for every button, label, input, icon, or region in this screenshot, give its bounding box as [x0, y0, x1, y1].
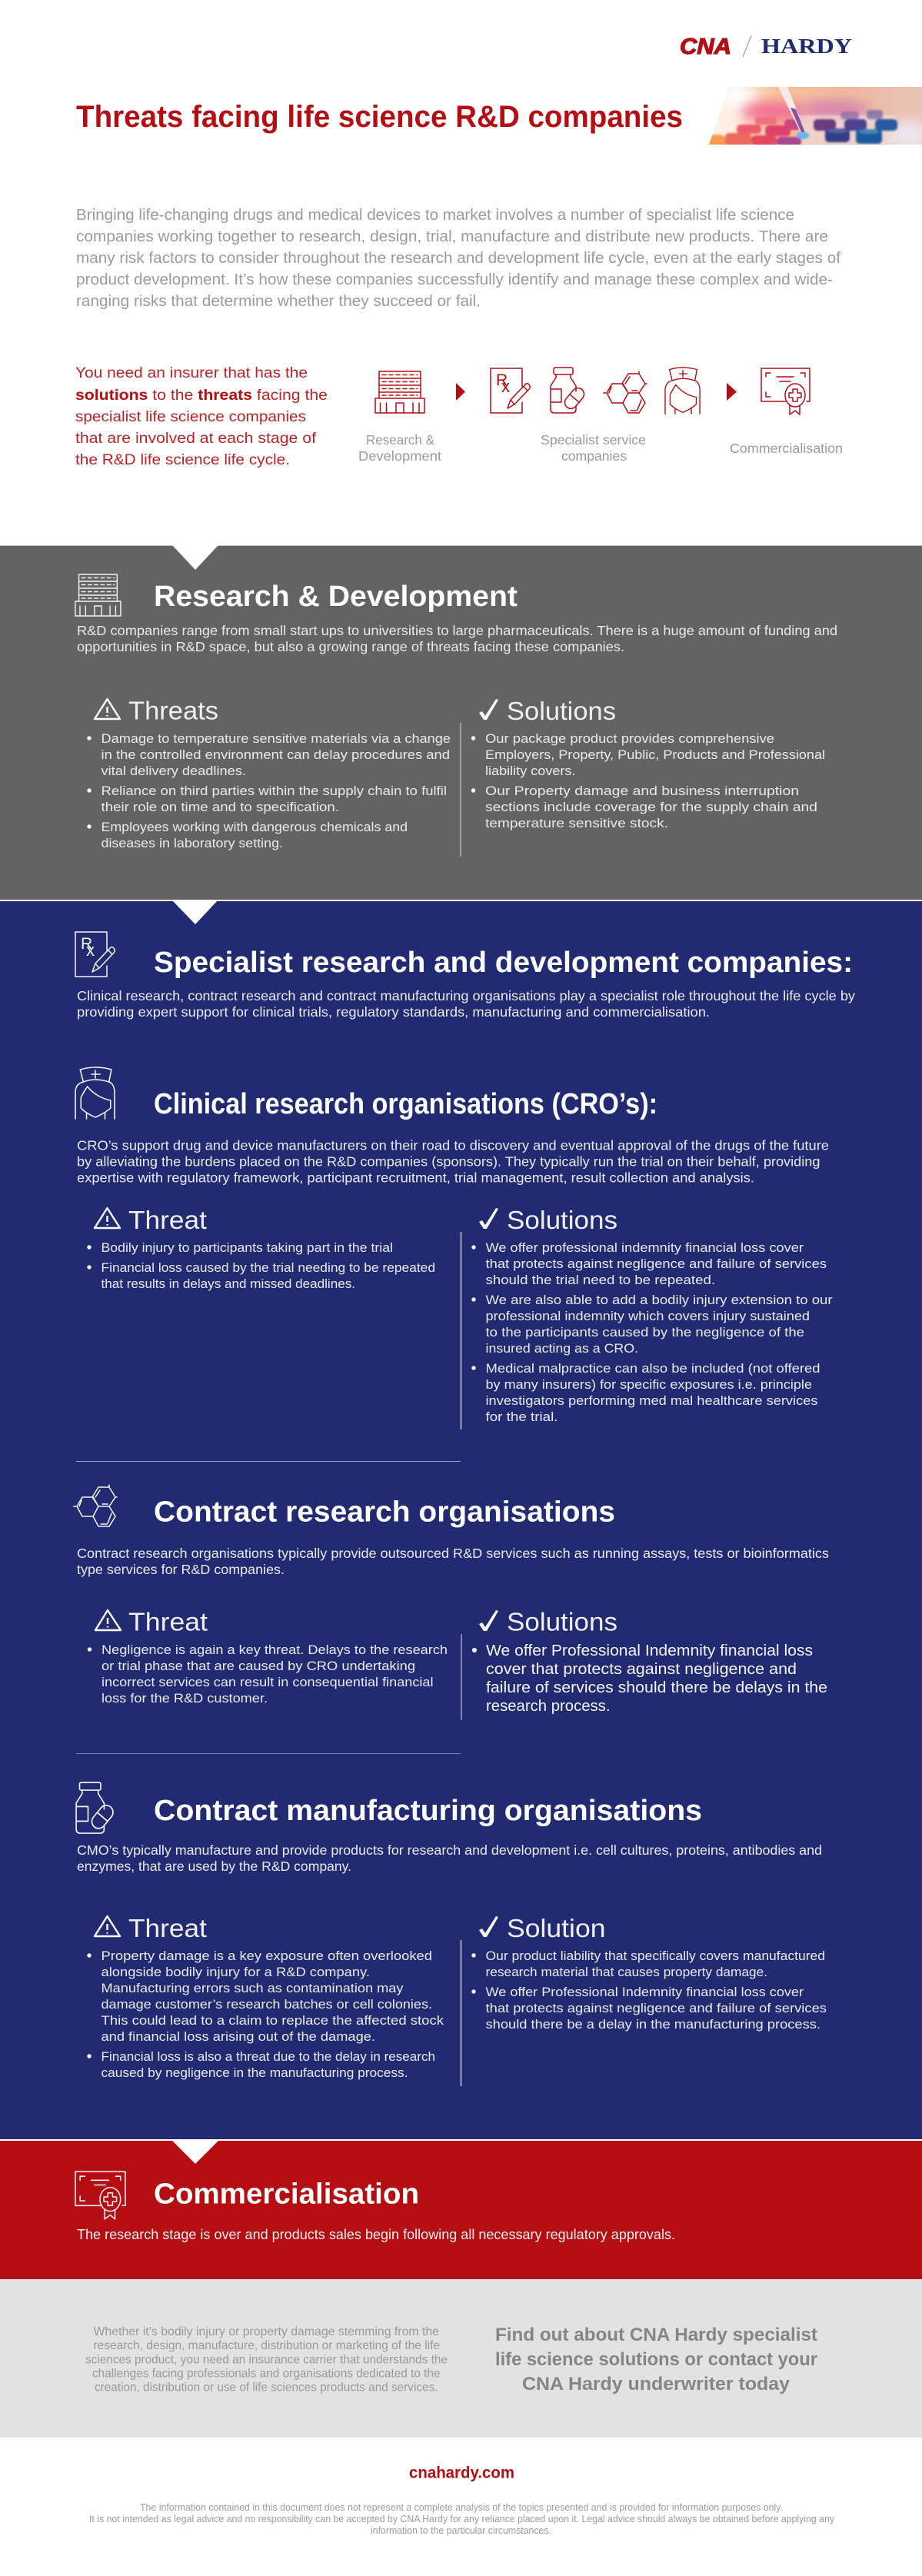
call to action text: life science solutions or contact your: [495, 2349, 817, 2370]
description: opportunities in R&D space, but also a growing range of threats facing these companies.: [77, 639, 624, 654]
summary text: [85, 2325, 448, 2395]
threat list: Financial loss caused by the trial needing to be repeated: [102, 1260, 435, 1275]
sub-panel: contract manufacturing organisations: [76, 1782, 827, 2086]
description: [77, 988, 855, 1020]
panel: call to action: [0, 2279, 922, 2438]
threats list: Employees working with dangerous chemicals and: [102, 820, 408, 834]
call to action text: CNA Hardy underwriter today: [522, 2374, 791, 2395]
callout: insurer statement: [75, 364, 328, 468]
threat list: that results in delays and missed deadlines.: [102, 1276, 355, 1291]
sub-panel: clinical research organisations: [75, 1067, 833, 1429]
solution heading: Solution: [507, 1915, 606, 1943]
icon: medicine bottle: [551, 368, 587, 413]
solutions list: insured acting as a CRO.: [486, 1341, 638, 1356]
summary text: research, design, manufacture, distribution or marketing of the life: [94, 2339, 440, 2352]
threat heading: Threat: [128, 1915, 208, 1943]
logo: CNA Hardy: [680, 35, 852, 59]
threats heading: Threats: [128, 697, 218, 726]
callout: insurer statement: the R&D life science life cycle.: [75, 451, 290, 468]
description: [77, 1138, 829, 1186]
solutions list: failure of services should there be delays in the: [486, 1679, 827, 1696]
label: commercialisation: Commercialisation: [730, 441, 843, 456]
threat heading: [95, 1915, 208, 1943]
solution list: research material that causes property damage.: [486, 1965, 767, 1979]
call to action text: [495, 2325, 817, 2395]
heading: Contract research organisations: [154, 1496, 615, 1529]
description: [77, 1546, 829, 1577]
threat list: incorrect services can result in consequential financial: [102, 1675, 434, 1689]
threat list: Financial loss is also a threat due to the delay in research: [102, 2049, 435, 2064]
description: [77, 1842, 822, 1874]
call to action text: Find out about CNA Hardy specialist: [495, 2325, 817, 2345]
disclaimer: The information contained in this document does not represent a complete analysis of the topics presented and is provided for information purposes only.: [140, 2502, 783, 2513]
threat heading: Threat: [128, 1206, 208, 1235]
description: Clinical research, contract research and contract manufacturing organisations play a specialist role throughout the life cycle by: [77, 988, 855, 1003]
website link: cnahardy.com: [409, 2464, 514, 2482]
solutions list: research process.: [486, 1698, 611, 1715]
threat heading: Threat: [128, 1609, 208, 1636]
intro text: [76, 206, 840, 310]
heading: Contract manufacturing organisations: [154, 1795, 702, 1827]
heading: Clinical research organisations (CRO’s):: [154, 1088, 657, 1120]
callout: insurer statement: that are involved at each stage of: [75, 430, 317, 447]
threat list: or trial phase that are caused by CRO undertaking: [102, 1659, 415, 1673]
threat list: This could lead to a claim to replace the affected stock: [102, 2013, 444, 2028]
arrow: to specialist services: [456, 383, 465, 401]
solutions list: that protects against negligence and failure of services: [486, 1256, 827, 1271]
threat list: and financial loss arising out of the damage.: [102, 2029, 375, 2044]
callout: insurer statement: solutions to the threats facing the: [75, 387, 328, 404]
solutions list: professional indemnity which covers injury sustained: [486, 1309, 810, 1323]
threats list: their role on time and to specification.: [102, 800, 339, 814]
solution list: that protects against negligence and failure of services: [486, 2001, 827, 2015]
threat list: [88, 1642, 448, 1706]
arrow: to commercialisation: [727, 383, 737, 401]
description: enzymes, that are used by the R&D company.: [77, 1859, 351, 1874]
title: Threats facing life science R&D companies: [76, 100, 683, 134]
solutions list: temperature sensitive stock.: [485, 816, 668, 830]
description: by alleviating the burdens placed on the R&D companies (sponsors). They typically run the trial on their behalf, providing: [77, 1153, 820, 1169]
threat list: damage customer’s research batches or cell colonies.: [102, 1997, 432, 2012]
disclaimer: [89, 2502, 835, 2536]
logo: CNA Hardy: CNA: [680, 35, 731, 59]
process flow: [358, 368, 843, 464]
solutions list: We offer professional indemnity financial loss cover: [486, 1240, 804, 1255]
threats list: Reliance on third parties within the supply chain to fulfil: [102, 784, 447, 798]
label: specialist service companies: companies: [561, 448, 627, 464]
solution list: We offer Professional Indemnity financial loss cover: [486, 1985, 804, 1999]
solutions list: Our Property damage and business interruption: [485, 784, 799, 798]
pointer: [172, 2141, 218, 2164]
logo: CNA Hardy: HARDY: [761, 35, 852, 58]
solution list: [471, 1949, 827, 2032]
solutions list: We are also able to add a bodily injury extension to our: [486, 1293, 833, 1307]
description: type services for R&D companies.: [77, 1562, 285, 1577]
panel background: [0, 2279, 922, 2438]
icon: building: [75, 574, 121, 616]
description: Contract research organisations typically provide outsourced R&D services such as running assays, tests or bioinformatics: [77, 1546, 829, 1561]
icon: medicine bottle: [76, 1782, 116, 1833]
solutions list: [471, 731, 825, 830]
solutions list: investigators performing med mal healthcare services: [486, 1393, 818, 1408]
heading: Specialist research and development companies:: [154, 947, 853, 979]
solutions list: [471, 1240, 833, 1424]
pointer: [172, 545, 218, 570]
summary text: challenges facing professionals and organisations dedicated to the: [92, 2367, 441, 2381]
description: CMO’s typically manufacture and provide products for research and development i.e. cell cultures, proteins, antibodies and: [77, 1842, 822, 1858]
solutions list: Medical malpractice can also be included (not offered: [486, 1361, 820, 1376]
threats list: diseases in laboratory setting.: [102, 836, 283, 850]
panel: commercialisation: [0, 2141, 922, 2279]
image: laboratory vials and pipette: [709, 87, 922, 145]
label: specialist service companies: Specialist service: [541, 432, 646, 448]
icon: certificate: [75, 2172, 125, 2219]
label: research and development: Research &: [366, 432, 434, 448]
solutions list: Our package product provides comprehensive: [485, 731, 774, 746]
solutions list: by many insurers) for specific exposures i.e. principle: [486, 1377, 812, 1392]
threats list: vital delivery deadlines.: [102, 764, 246, 778]
icon: nurse: [665, 368, 700, 414]
solutions heading: Solutions: [507, 1609, 617, 1636]
icon: prescription: [491, 368, 530, 413]
solutions list: to the participants caused by the negligence of the: [486, 1325, 804, 1340]
solutions list: Employers, Property, Public, Products and Professional: [485, 747, 825, 762]
icon: prescription: R: [496, 371, 508, 389]
disclaimer: information to the particular circumstances.: [371, 2525, 551, 2536]
description: [77, 623, 837, 654]
pointer: [171, 900, 218, 924]
heading: Commercialisation: [154, 2178, 419, 2210]
threat list: caused by negligence in the manufacturing process.: [102, 2065, 408, 2080]
icon: certificate: [761, 368, 810, 414]
threat list: alongside bodily injury for a R&D company.: [102, 1965, 370, 1979]
label: specialist service companies: [541, 432, 646, 464]
icon: molecule: [604, 371, 647, 413]
icon: prescription: R: [81, 935, 92, 953]
icon: molecule: [74, 1485, 117, 1526]
icon: nurse: [75, 1067, 115, 1119]
intro text: product development. It’s how these companies successfully identify and manage these complex and wide-: [76, 271, 833, 288]
solution list: should there be a delay in the manufacturing process.: [486, 2017, 820, 2032]
solutions heading: Solutions: [507, 1206, 617, 1235]
threat heading: [95, 1206, 208, 1235]
icon: prescription: x: [86, 940, 95, 960]
summary text: creation, distribution or use of life sciences products and services.: [95, 2381, 438, 2395]
icon: research building: [375, 371, 424, 413]
summary text: sciences product, you need an insurance carrier that understands the: [85, 2353, 448, 2367]
threat list: Manufacturing errors such as contamination may: [102, 1981, 404, 1995]
summary text: Whether it’s bodily injury or property damage stemming from the: [94, 2325, 439, 2338]
solutions list: cover that protects against negligence and: [486, 1661, 797, 1678]
description: CRO’s support drug and device manufacturers on their road to discovery and eventual approval of the drugs of the future: [77, 1138, 829, 1153]
solutions heading: Solutions: [507, 697, 616, 726]
solutions list: for the trial.: [486, 1409, 558, 1424]
threat heading: [95, 1609, 208, 1636]
disclaimer: It is not intended as legal advice and no responsibility can be accepted by CNA Hardy for any reliance placed upon it. Legal advice should always be obtained before applying any: [89, 2514, 835, 2524]
intro text: ranging risks that determine whether they succeed or fail.: [76, 292, 481, 310]
panel background: [0, 545, 922, 900]
heading: Research & Development: [154, 581, 518, 613]
threats list: Damage to temperature sensitive materials via a change: [102, 731, 451, 746]
threat list: Bodily injury to participants taking part in the trial: [102, 1240, 393, 1255]
description: The research stage is over and products sales begin following all necessary regulatory approvals.: [77, 2226, 675, 2242]
solutions list: liability covers.: [485, 764, 575, 778]
threat list: [87, 1240, 435, 1291]
panel: specialist research and development companies: [0, 900, 922, 2139]
label: research and development: Development: [358, 448, 441, 464]
threats list: [87, 731, 451, 850]
solutions list: [472, 1642, 827, 1715]
solutions list: should the trial need to be repeated.: [486, 1273, 715, 1287]
threat list: Property damage is a key exposure often overlooked: [102, 1949, 432, 1963]
icon: prescription: x: [501, 377, 510, 396]
solution list: Our product liability that specifically covers manufactured: [486, 1949, 825, 1963]
threats list: in the controlled environment can delay procedures and: [102, 747, 450, 762]
label: research and development: [358, 432, 441, 464]
callout: insurer statement: specialist life science companies: [75, 408, 306, 425]
icon: prescription: [75, 932, 115, 977]
sub-panel: contract research organisations: [74, 1485, 829, 1720]
intro text: companies working together to research, design, trial, manufacture and distribute new products. There are: [76, 228, 828, 245]
panel background: [0, 2141, 922, 2279]
intro text: Bringing life-changing drugs and medical devices to market involves a number of specialist life science: [76, 206, 794, 224]
intro text: many risk factors to consider throughout the research and development life cycle, even at the early stages of: [76, 249, 840, 267]
threat list: Negligence is again a key threat. Delays to the research: [102, 1642, 448, 1657]
description: expertise with regulatory framework, participant recruitment, trial management, result collection and analysis.: [77, 1170, 754, 1186]
threat list: [87, 1949, 444, 2080]
callout: insurer statement: You need an insurer that has the: [75, 364, 308, 381]
solutions list: We offer Professional Indemnity financial loss: [486, 1642, 813, 1659]
panel background: [0, 901, 922, 2139]
description: providing expert support for clinical trials, regulatory standards, manufacturing and commercialisation.: [77, 1004, 710, 1020]
threat list: loss for the R&D customer.: [102, 1691, 268, 1706]
panel: research and development: [0, 545, 922, 900]
solutions list: sections include coverage for the supply chain and: [485, 800, 817, 814]
description: R&D companies range from small start ups to universities to large pharmaceuticals. There is a huge amount of funding and: [77, 623, 837, 638]
